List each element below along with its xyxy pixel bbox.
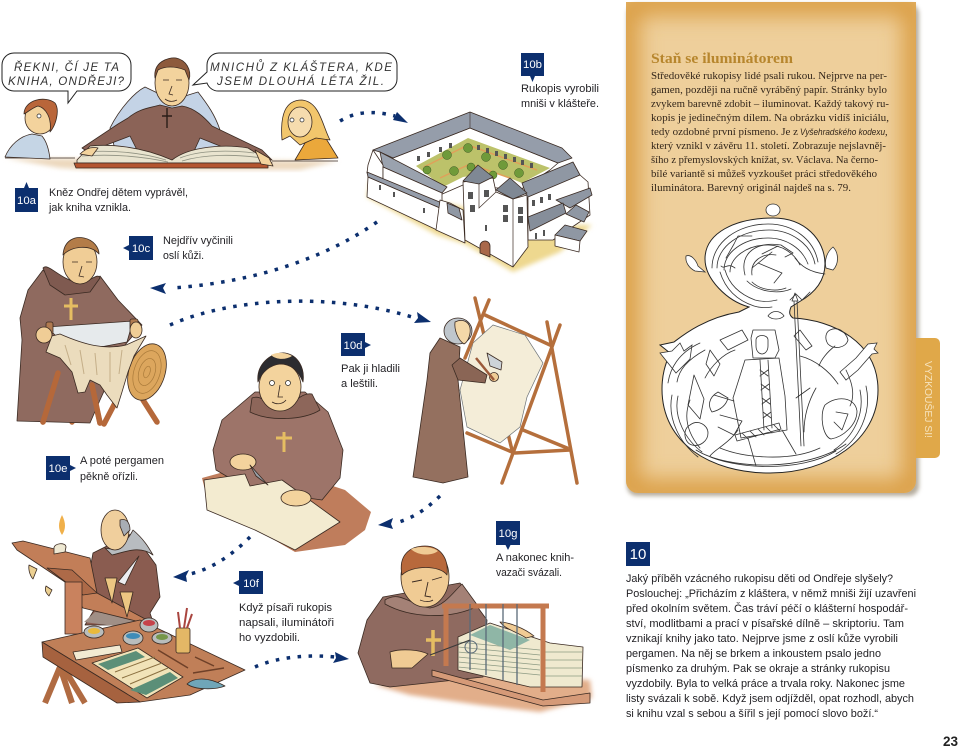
- caption 10a: [48, 187, 188, 214]
- badge 10d: 10d: [343, 340, 363, 352]
- panel text: bílé variantě si můžeš vyzkoušet práci středověkého: [651, 168, 877, 180]
- caption 10g: vazači svázali.: [496, 567, 562, 579]
- illustration: monastery: [367, 112, 592, 272]
- boy: [5, 99, 57, 159]
- main story text: vyzdobily. Byla to velká práce a trvala roky. Nakonec jsme: [626, 678, 905, 690]
- arrow: to stretching: [170, 301, 431, 325]
- speech bubble: priest: MNICHŮ Z KLÁŠTERA, KDE: [210, 60, 392, 74]
- illustration: monk cutting parchment: [202, 353, 371, 552]
- panel text: šího z přemyslovských knížat, sv. Václava. Na černo-: [651, 154, 878, 166]
- speech bubble: children: ŘEKNI, ČÍ JE TA: [14, 61, 119, 74]
- main story text: Jaký příběh vzácného rukopisu děti od Ondřeje slyšely?: [626, 573, 893, 585]
- caption 10b: mniši v klášteře.: [521, 98, 599, 110]
- caption 10d: [341, 363, 400, 390]
- panel text: zvykem barevně zdobit – iluminovat. Každý takový ru-: [651, 98, 889, 110]
- badge 10b: 10b: [523, 59, 542, 71]
- panel text: Vyšehradského kodexu: [800, 127, 886, 138]
- caption 10g: [496, 552, 574, 579]
- badge 10: [626, 542, 650, 566]
- panel text: Středověké rukopisy lidé psali rukou. Nejprve na per-: [651, 70, 887, 82]
- caption 10f: ho vyzdobili.: [239, 632, 300, 644]
- illustration: priest with book and children: [5, 58, 338, 170]
- arrow: to tanning: [150, 222, 377, 294]
- badge 10c: [123, 236, 153, 260]
- arrow: to binder: [255, 652, 349, 667]
- caption 10a: Kněz Ondřej dětem vyprávěl,: [49, 187, 188, 199]
- main story text: vznikají knihy jako tato. Nejprve jsme z oslí kůže vyrobili: [626, 633, 898, 645]
- main story text: písmenko za druhým. Pak se okraje a stránky rukopisu: [626, 663, 890, 675]
- arrow: to monastery: [340, 112, 408, 123]
- panel text: ,: [885, 126, 888, 138]
- badge 10a: [15, 182, 38, 212]
- badge 10e: 10e: [48, 463, 68, 475]
- caption 10f: [239, 602, 334, 644]
- caption 10e: pěkně ořízli.: [80, 471, 138, 483]
- girl: [282, 100, 338, 160]
- caption 10a: jak kniha vznikla.: [48, 202, 131, 214]
- caption 10b: Rukopis vyrobili: [521, 83, 599, 95]
- badge 10d: [341, 333, 371, 356]
- caption 10f: napsali, iluminátoři: [239, 617, 334, 629]
- illuminated initial: [660, 204, 878, 473]
- badge 10g: 10g: [498, 528, 518, 540]
- caption 10d: Pak ji hladili: [341, 363, 400, 375]
- speech bubble: priest: [193, 53, 397, 91]
- panel heading: Staň se iluminátorem: [651, 51, 793, 67]
- arrow: to scribe: [173, 537, 250, 582]
- caption 10b: [521, 83, 599, 110]
- badge 10b: [521, 53, 544, 82]
- badge 10e: [46, 456, 76, 480]
- caption 10e: [80, 455, 164, 483]
- tab: vyzkoušej si: [905, 338, 940, 458]
- illustration: scribe at desk: [12, 510, 245, 703]
- main story text: listy svázali k sobě. Když jsem odjížděl, opat rozhodl, abych: [626, 693, 914, 705]
- badge 10f: 10f: [243, 578, 260, 590]
- panel text: [651, 70, 889, 194]
- badge 10: 10: [630, 546, 646, 563]
- ink bowls: [84, 618, 172, 645]
- illustration: monk stretching hide on frame: [413, 298, 577, 483]
- speech bubble: children: KNIHA, ONDŘEJI?: [8, 75, 125, 88]
- caption 10f: Když písaři rukopis: [239, 602, 332, 614]
- panel text: který vznikl v závěru 11. století. Zobrazuje nejslavněj-: [651, 140, 886, 152]
- caption 10g: A nakonec knih-: [496, 552, 574, 564]
- tab: vyzkoušej si: VYZKOUŠEJ SI!: [922, 361, 935, 438]
- badge 10g: [496, 521, 520, 550]
- badge 10f: [233, 571, 263, 594]
- panel text: kopis je jedinečným dílem. Na obrázku vidíš iniciálu,: [651, 112, 889, 124]
- caption 10c: Nejdřív vyčinili: [163, 235, 233, 247]
- badge 10c: 10c: [132, 243, 150, 255]
- arrow: to parchment: [378, 496, 440, 529]
- panel text: iluminátora. Barevný originál najdeš na s. 79.: [651, 182, 851, 194]
- illustration: bookbinder: [358, 546, 592, 712]
- illuminated manuscript: [92, 648, 183, 698]
- caption 10e: A poté pergamen: [80, 455, 164, 467]
- main story text: pergamen. Na něj se brkem a inkoustem psalo jedno: [626, 648, 881, 660]
- panel text: tedy ozdobné první písmeno. Je z: [651, 126, 798, 138]
- speech bubble: children: [2, 53, 131, 103]
- main story text: [626, 573, 916, 720]
- caption 10c: [163, 235, 233, 262]
- caption 10d: a leštili.: [341, 378, 378, 390]
- main story text: před okolním světem. Čas tráví péčí o klášterní hospodář-: [626, 602, 908, 615]
- speech bubble: priest: JSEM DLOUHÁ LÉTA ŽIL.: [216, 75, 384, 88]
- badge 10a: 10a: [17, 195, 37, 207]
- caption 10c: oslí kůži.: [163, 250, 204, 262]
- illustration: monk tanning hide: [17, 238, 173, 424]
- panel text: gamen, později na ručně vyráběný papír. Stránky bylo: [651, 84, 887, 96]
- panel: Staň se iluminátorem: [626, 2, 940, 496]
- main story text: si knihu vzal s sebou a šířil s její pomocí slovo boží.“: [626, 708, 878, 720]
- main story text: ství, modlitbami a prací v písařské dílně – skriptoriu. Tam: [626, 618, 904, 630]
- main story text: Poslouchej: „Přicházím z kláštera, v němž mniši žijí uzavřeni: [626, 588, 916, 600]
